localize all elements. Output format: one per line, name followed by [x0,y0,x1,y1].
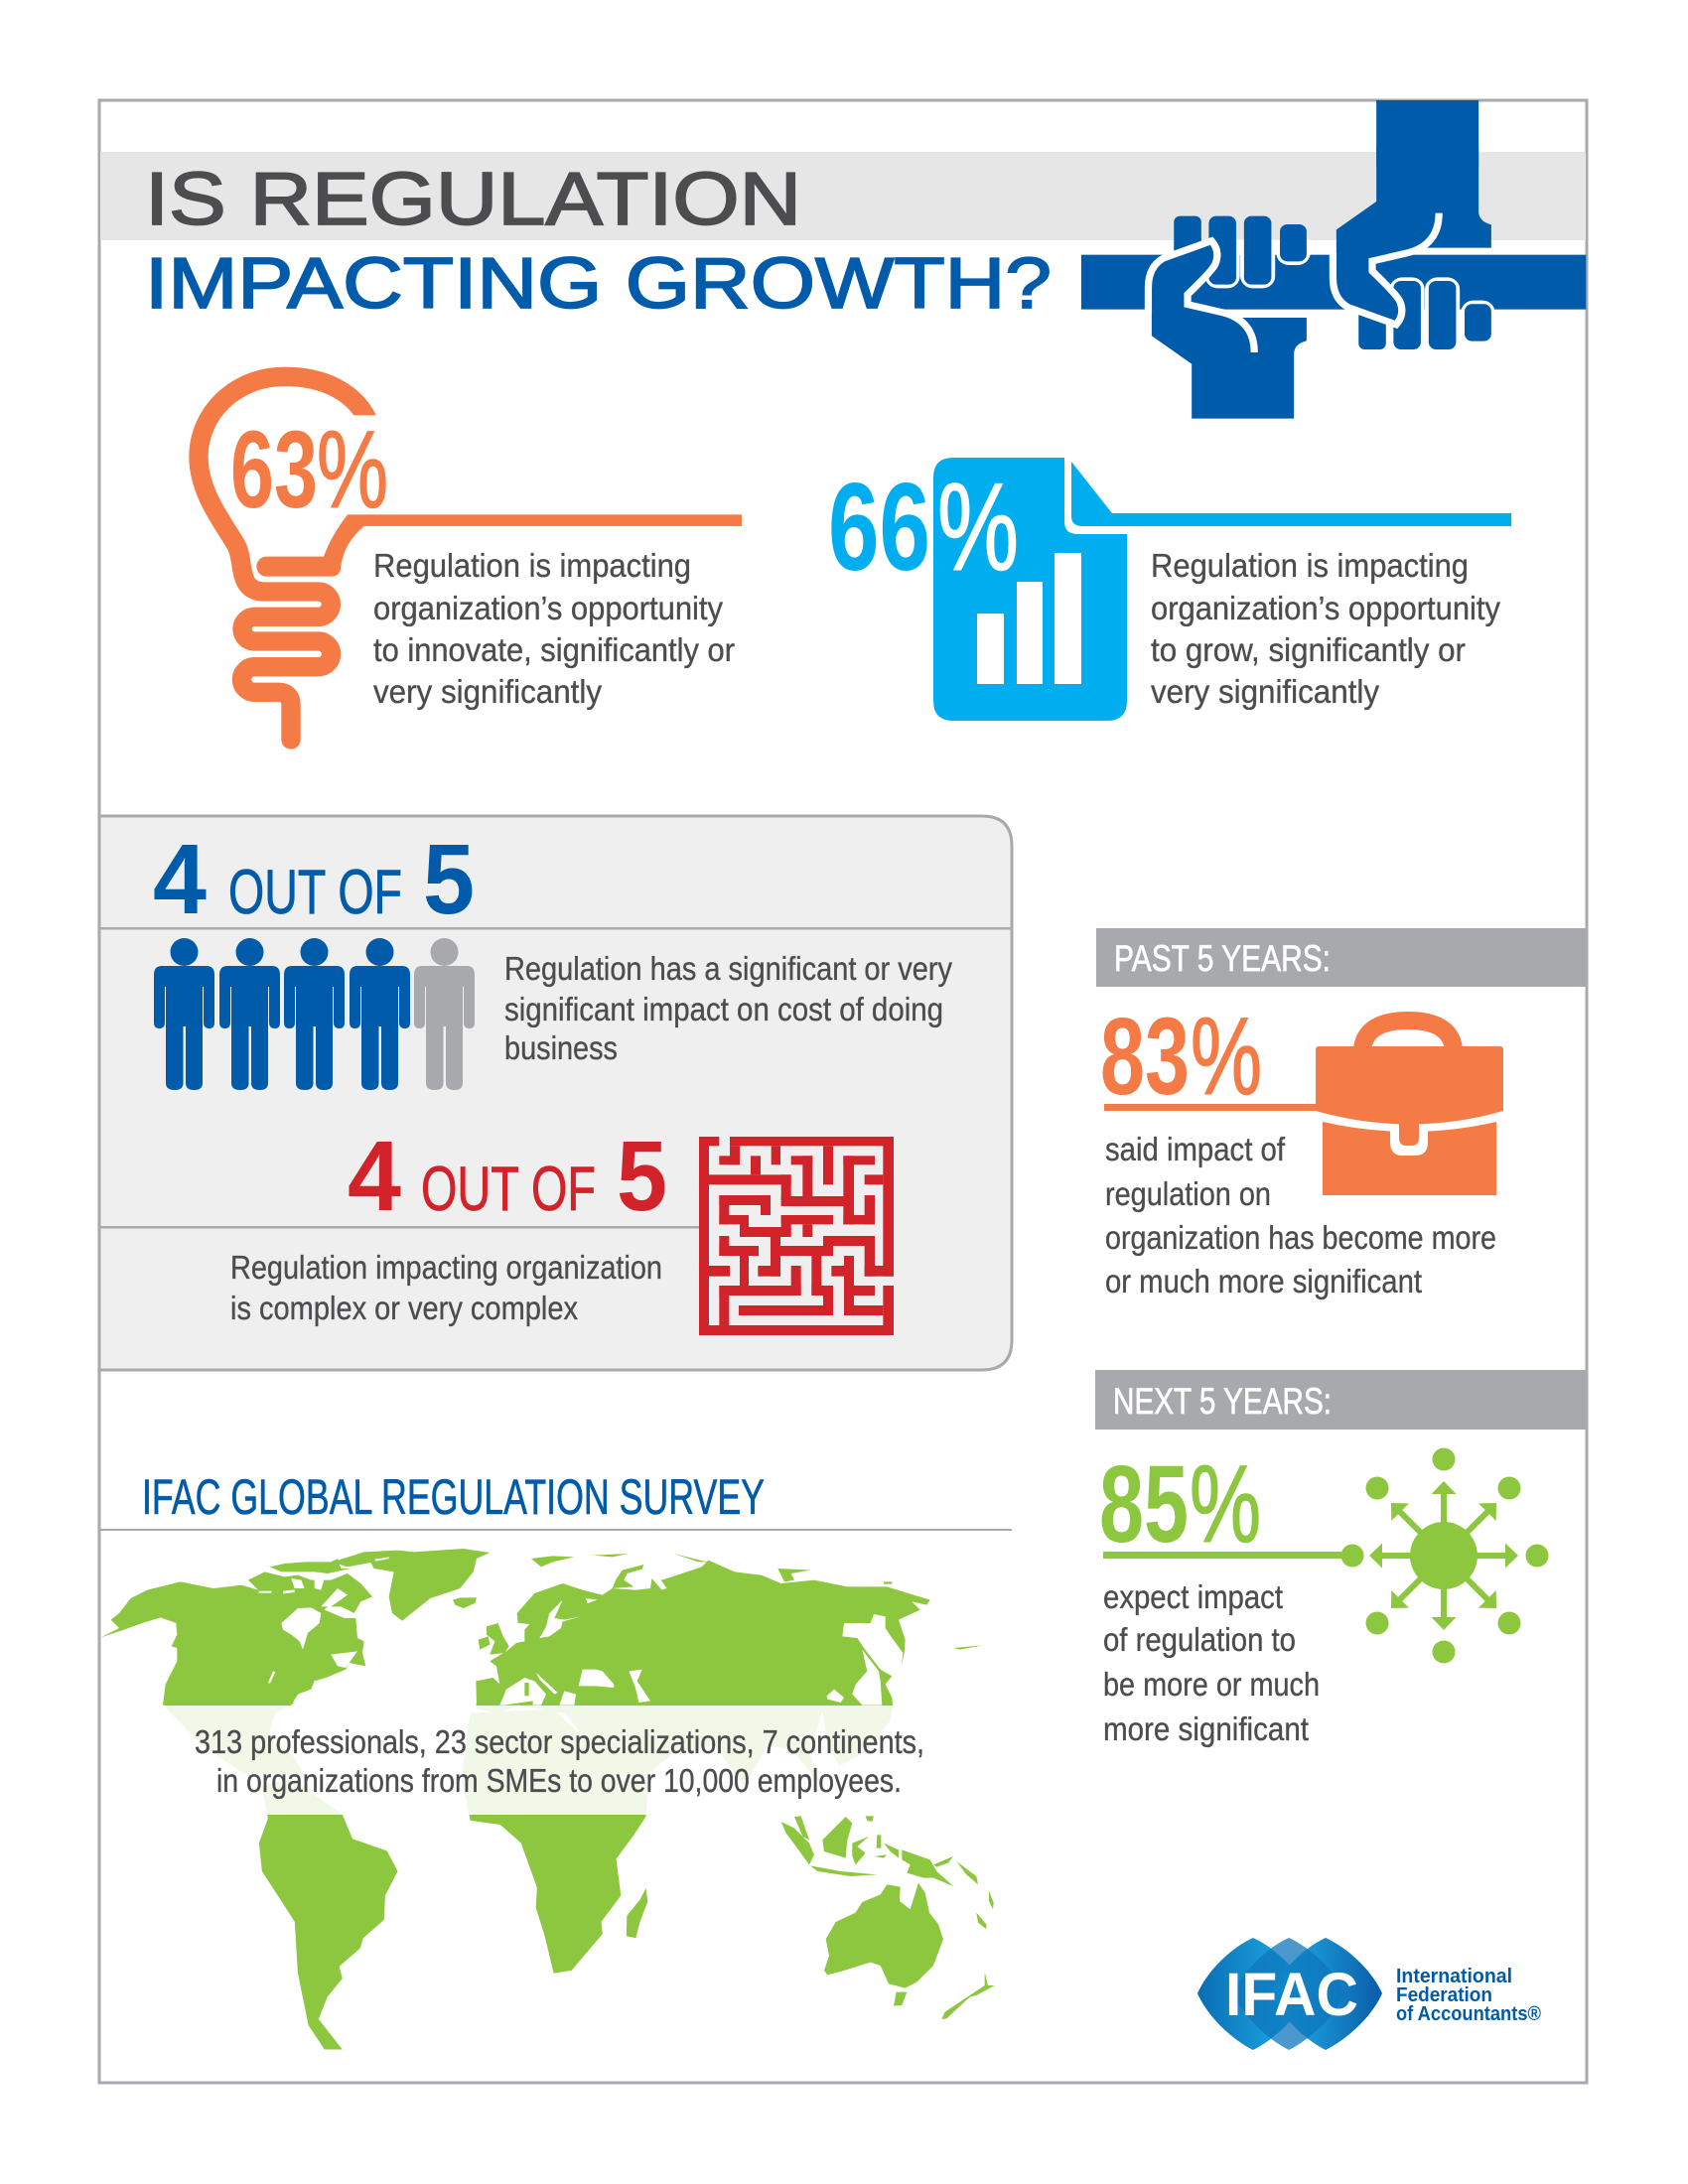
stat: 85% [1099,1443,1341,1566]
stat: 66%: 66 [828,459,930,597]
text: cost of doing business: business [504,1029,618,1066]
heading: red 4 out of 5 [348,1121,667,1232]
heading: red 4 out of 5: 5 [617,1121,667,1232]
title [145,157,1052,324]
stat: 83%: % [1191,996,1262,1118]
text: next impact: of regulation to [1103,1621,1296,1658]
text: complex: is complex or very complex [230,1290,578,1326]
text: innovate: organization’s opportunity [373,590,723,626]
text: survey description: in organizations from SMEs to over 10,000 employees. [216,1762,902,1799]
icon: briefcase [1316,1021,1503,1195]
heading: blue 4 out of 5: 5 [423,824,475,935]
text: cost of doing business [504,950,952,1066]
logo: IFAC: International [1396,1966,1512,1987]
icon: five people [154,938,475,1090]
text: past impact: said impact of [1105,1131,1286,1167]
text: survey description: 313 professionals, 23 sector specializations, 7 continents, [195,1723,924,1760]
panel: past 5 years: PAST 5 YEARS: [1114,938,1331,979]
logo: IFAC: of Accountants® [1396,2003,1541,2025]
text: next impact [1103,1578,1320,1747]
icon: light bulb [199,376,742,750]
text: grow [1151,547,1500,710]
heading: blue 4 out of 5 [153,824,475,935]
heading: blue 4 out of 5: OUT OF [228,858,402,927]
panel: past 5 years [1096,928,1586,987]
text: innovate: to innovate, significantly or [373,631,735,668]
stat: 66%: % [937,459,1019,597]
logo: IFAC [1197,1938,1541,2050]
stat: 63%: % [317,409,388,531]
text: cost of doing business: significant impact on cost of doing [504,991,943,1027]
text: grow: to grow, significantly or [1151,631,1466,668]
panel: 4 out of 5 [99,816,1012,1370]
logo: IFAC: Federation [1396,1984,1492,2006]
panel: next 5 years [1095,1370,1586,1430]
Oceania [781,1816,995,2019]
icon: radiating hub [1340,1447,1549,1664]
North America and North Atlantic [101,1549,509,1706]
text: past impact: organization has become more [1105,1219,1496,1256]
text: next impact: more significant [1103,1710,1309,1747]
text: grow: Regulation is impacting [1151,547,1469,584]
text: complex: Regulation impacting organization [230,1249,662,1286]
text: survey description [195,1723,924,1799]
heading band [100,152,1586,240]
stat: 83%: 83 [1100,996,1190,1118]
text: innovate: Regulation is impacting [373,547,691,584]
text: next impact: expect impact [1103,1578,1283,1615]
caption band over map [163,1706,893,1815]
logo: IFAC: IFAC [1225,1961,1358,2028]
title: IMPACTING GROWTH? [145,244,1052,324]
text: past impact: regulation on [1105,1175,1271,1212]
icon: document with bar chart [933,458,1511,721]
heading: red 4 out of 5: OUT OF [421,1155,596,1224]
stat: 83% [1100,996,1318,1118]
stat: 85%: 85 [1099,1443,1189,1566]
icon: maze [699,1137,894,1335]
text: innovate: very significantly [373,673,602,710]
panel: outer frame [99,100,1587,2083]
text: complex [230,1249,662,1326]
text: cost of doing business: Regulation has a significant or very [504,950,952,987]
text: past impact [1105,1131,1496,1299]
stat: 63%: 63 [230,409,318,531]
text: next impact: be more or much [1103,1666,1320,1703]
heading: blue 4 out of 5: 4 [153,824,207,935]
text: past impact: or much more significant [1105,1263,1422,1299]
icon: interlocked hands [1081,100,1586,419]
text: grow: very significantly [1151,673,1379,710]
text: innovate [373,547,735,710]
world map [101,1549,995,2049]
southern continents and land beneath the caption band [164,1704,893,2049]
text: grow: organization’s opportunity [1151,590,1500,626]
Eurasia [476,1554,983,1706]
heading: survey: IFAC GLOBAL REGULATION SURVEY [142,1469,765,1525]
title: IS REGULATION [145,157,801,240]
heading: red 4 out of 5: 4 [348,1121,401,1232]
panel: next 5 years: NEXT 5 YEARS: [1113,1381,1332,1422]
stat: 85%: % [1190,1443,1261,1566]
